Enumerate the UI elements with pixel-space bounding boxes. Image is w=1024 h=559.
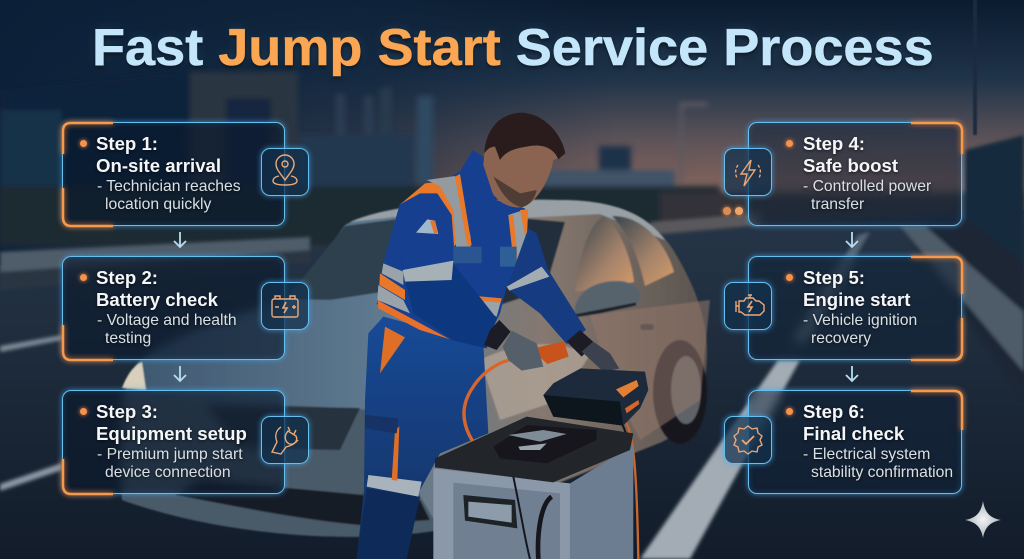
bullet [80,274,87,281]
icon: hand and plug [261,416,309,464]
door reflection [590,300,710,440]
distant factory and horizon [0,72,1024,246]
description: transfer [811,196,864,213]
panel: step 6 [720,385,968,498]
bottom-right sparkle [965,501,1001,538]
icon: map pin [261,148,309,196]
description: recovery [811,330,871,347]
side windows [575,216,634,292]
door handle [640,324,654,330]
description: location quickly [105,196,211,213]
description [97,446,243,481]
heading [96,267,218,312]
arm near [390,207,497,348]
description: device connection [105,464,231,481]
bullet [786,274,793,281]
title: Fast Jump Start Service Process [92,19,934,77]
description [803,446,953,481]
heading: Step 1: [96,133,158,154]
heading: Final check [803,423,904,444]
heading: Step 3: [96,401,158,422]
panel: step 3 [57,386,313,500]
heading [803,401,904,444]
jump starter [543,368,648,426]
heading: Step 2: [96,267,158,288]
heading: Engine start [803,289,910,310]
arrow: step 5 to step 6 [845,366,859,382]
bullet [80,140,87,147]
cart [433,468,570,559]
panel: step 1 [57,117,313,232]
orange corner accent [57,322,116,366]
description [97,178,241,213]
logo patch [416,219,438,234]
hi-vis shoulder [401,182,459,247]
utility pole [973,0,977,135]
decorative dots [720,204,746,218]
panel: step 2 [57,252,313,366]
neck and face [483,120,563,207]
heading [803,133,898,176]
heading: Step 5: [803,267,865,288]
roof highlight [350,200,665,240]
heading: Equipment setup [96,423,247,444]
bumper [122,395,440,537]
arrow: step 2 to step 3 [173,366,187,382]
road markings [0,232,870,559]
description: testing [105,330,151,347]
description [97,312,237,348]
windshield [286,216,420,300]
battery [493,425,597,463]
orange corner accent [908,118,968,158]
bullet [786,140,793,147]
headlights [122,362,146,390]
clamp [537,341,569,364]
heading: Battery check [96,289,218,310]
technician and equipment [357,113,648,559]
heading [96,133,221,176]
wheel [653,340,707,444]
chest pockets [453,247,482,263]
description: - Vehicle ignition [803,312,917,329]
waist bands [377,285,410,313]
heading: On-site arrival [96,155,221,176]
description: - Technician reaches [97,178,241,195]
heading: Step 6: [803,401,865,422]
road surface [0,210,1024,559]
icon: battery [261,282,309,330]
left guardrail [0,213,760,290]
grille [205,405,360,450]
orange corner accent [908,385,968,434]
description: - Voltage and health [97,312,237,329]
description: stability confirmation [811,464,953,481]
heading: Safe boost [803,155,898,176]
car body [120,200,707,537]
gloves [503,331,543,371]
bullet [786,408,793,415]
icon: gear with check [724,416,772,464]
hair [484,113,565,160]
bullet [80,408,87,415]
torso [377,150,530,347]
icon: lightning bolt [724,148,772,196]
orange corner accents [908,251,968,366]
orange corner accent [57,456,116,500]
legs [357,317,488,559]
arrow: step 1 to step 2 [173,232,187,248]
heading: Step 4: [803,133,865,154]
heading [96,401,247,446]
sky [0,0,1024,260]
panel: step 4 [720,118,968,230]
description: - Controlled power [803,178,931,195]
orange cables [464,360,510,456]
car [120,200,710,537]
panel: step 5 [720,251,968,366]
arm far [507,228,586,344]
orange corner accents [57,117,116,232]
description: - Electrical system [803,446,930,463]
heading [803,267,910,312]
icon: engine [724,282,772,330]
arrow: step 4 to step 5 [845,232,859,248]
description [803,178,931,213]
mirror [574,281,640,316]
description: - Premium jump start [97,446,243,463]
right verge [900,135,1024,559]
description [803,312,917,347]
